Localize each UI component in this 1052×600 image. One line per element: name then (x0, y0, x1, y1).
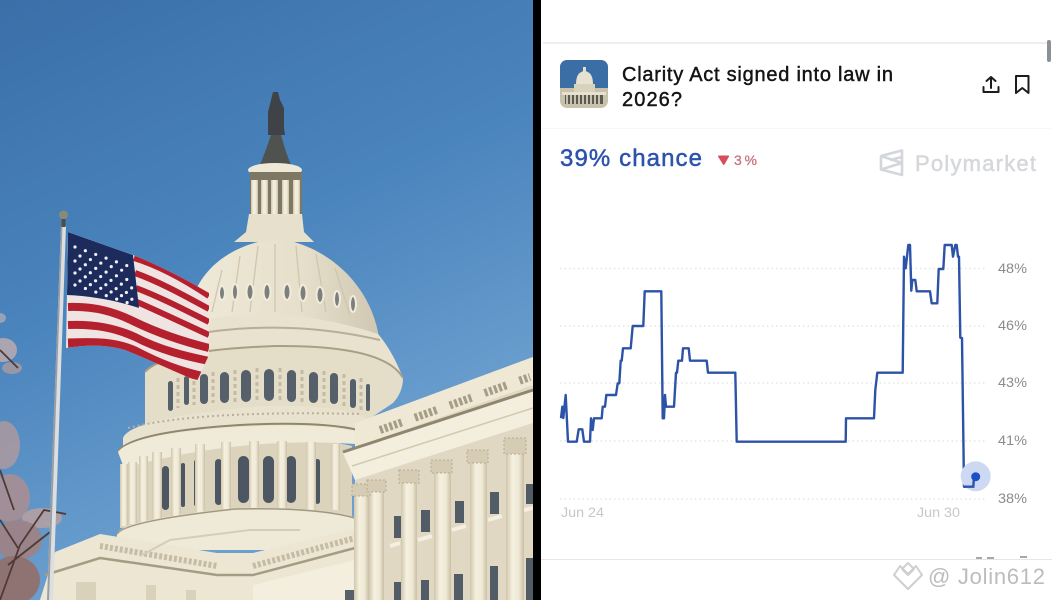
chart gridlines (560, 268, 986, 499)
lower terrace building (40, 528, 355, 600)
y axis labels: 41% (998, 433, 1027, 448)
change indicator: 3% (734, 152, 757, 168)
y axis labels (998, 261, 1027, 506)
statue of freedom (268, 92, 285, 135)
price line (561, 245, 976, 487)
y axis labels: 43% (998, 375, 1027, 390)
current chance: 39% chance (560, 145, 702, 172)
flag pole (47, 210, 68, 600)
capitol dome (117, 92, 403, 550)
icon: share (984, 77, 998, 92)
line chart (560, 245, 1027, 520)
title (622, 64, 893, 111)
dome shell (190, 241, 379, 340)
right wing portico (343, 357, 533, 600)
change indicator (718, 152, 757, 168)
cherry blossom trees (0, 313, 66, 600)
x axis labels (561, 505, 960, 520)
flag canton with stars (67, 232, 139, 308)
y axis labels: 48% (998, 261, 1027, 276)
upper drum with windows (145, 346, 403, 428)
black divider (533, 0, 541, 600)
dome dormers (219, 284, 356, 312)
portico windows (394, 484, 533, 600)
current value marker (961, 461, 991, 491)
title: 2026? (622, 89, 682, 111)
colonnade wall (120, 440, 352, 528)
watermark: @ Jolin612 (928, 564, 1045, 589)
colonnade base (117, 508, 358, 550)
icon: capitol thumbnail (560, 60, 608, 108)
icon: bookmark (1016, 76, 1028, 93)
flag stripes (68, 258, 209, 378)
scrollbar (1047, 40, 1051, 62)
balustrade ring (123, 406, 366, 458)
american flag (66, 232, 209, 381)
polymarket logo: Polymarket (915, 151, 1036, 176)
x axis labels: Jun 24 (561, 505, 605, 520)
x axis labels: Jun 30 (917, 505, 960, 520)
y axis labels: 38% (998, 491, 1027, 506)
photo panel: US Capitol and flag (0, 0, 533, 600)
y axis labels: 46% (998, 318, 1027, 333)
panel: market card (541, 0, 1052, 600)
colonnade columns (120, 441, 340, 526)
title: Clarity Act signed into law in (622, 64, 893, 86)
column capitals (352, 438, 526, 496)
lantern tholos (234, 163, 314, 242)
bottom divider and clipped footer (541, 557, 1052, 560)
portico columns (354, 447, 524, 600)
